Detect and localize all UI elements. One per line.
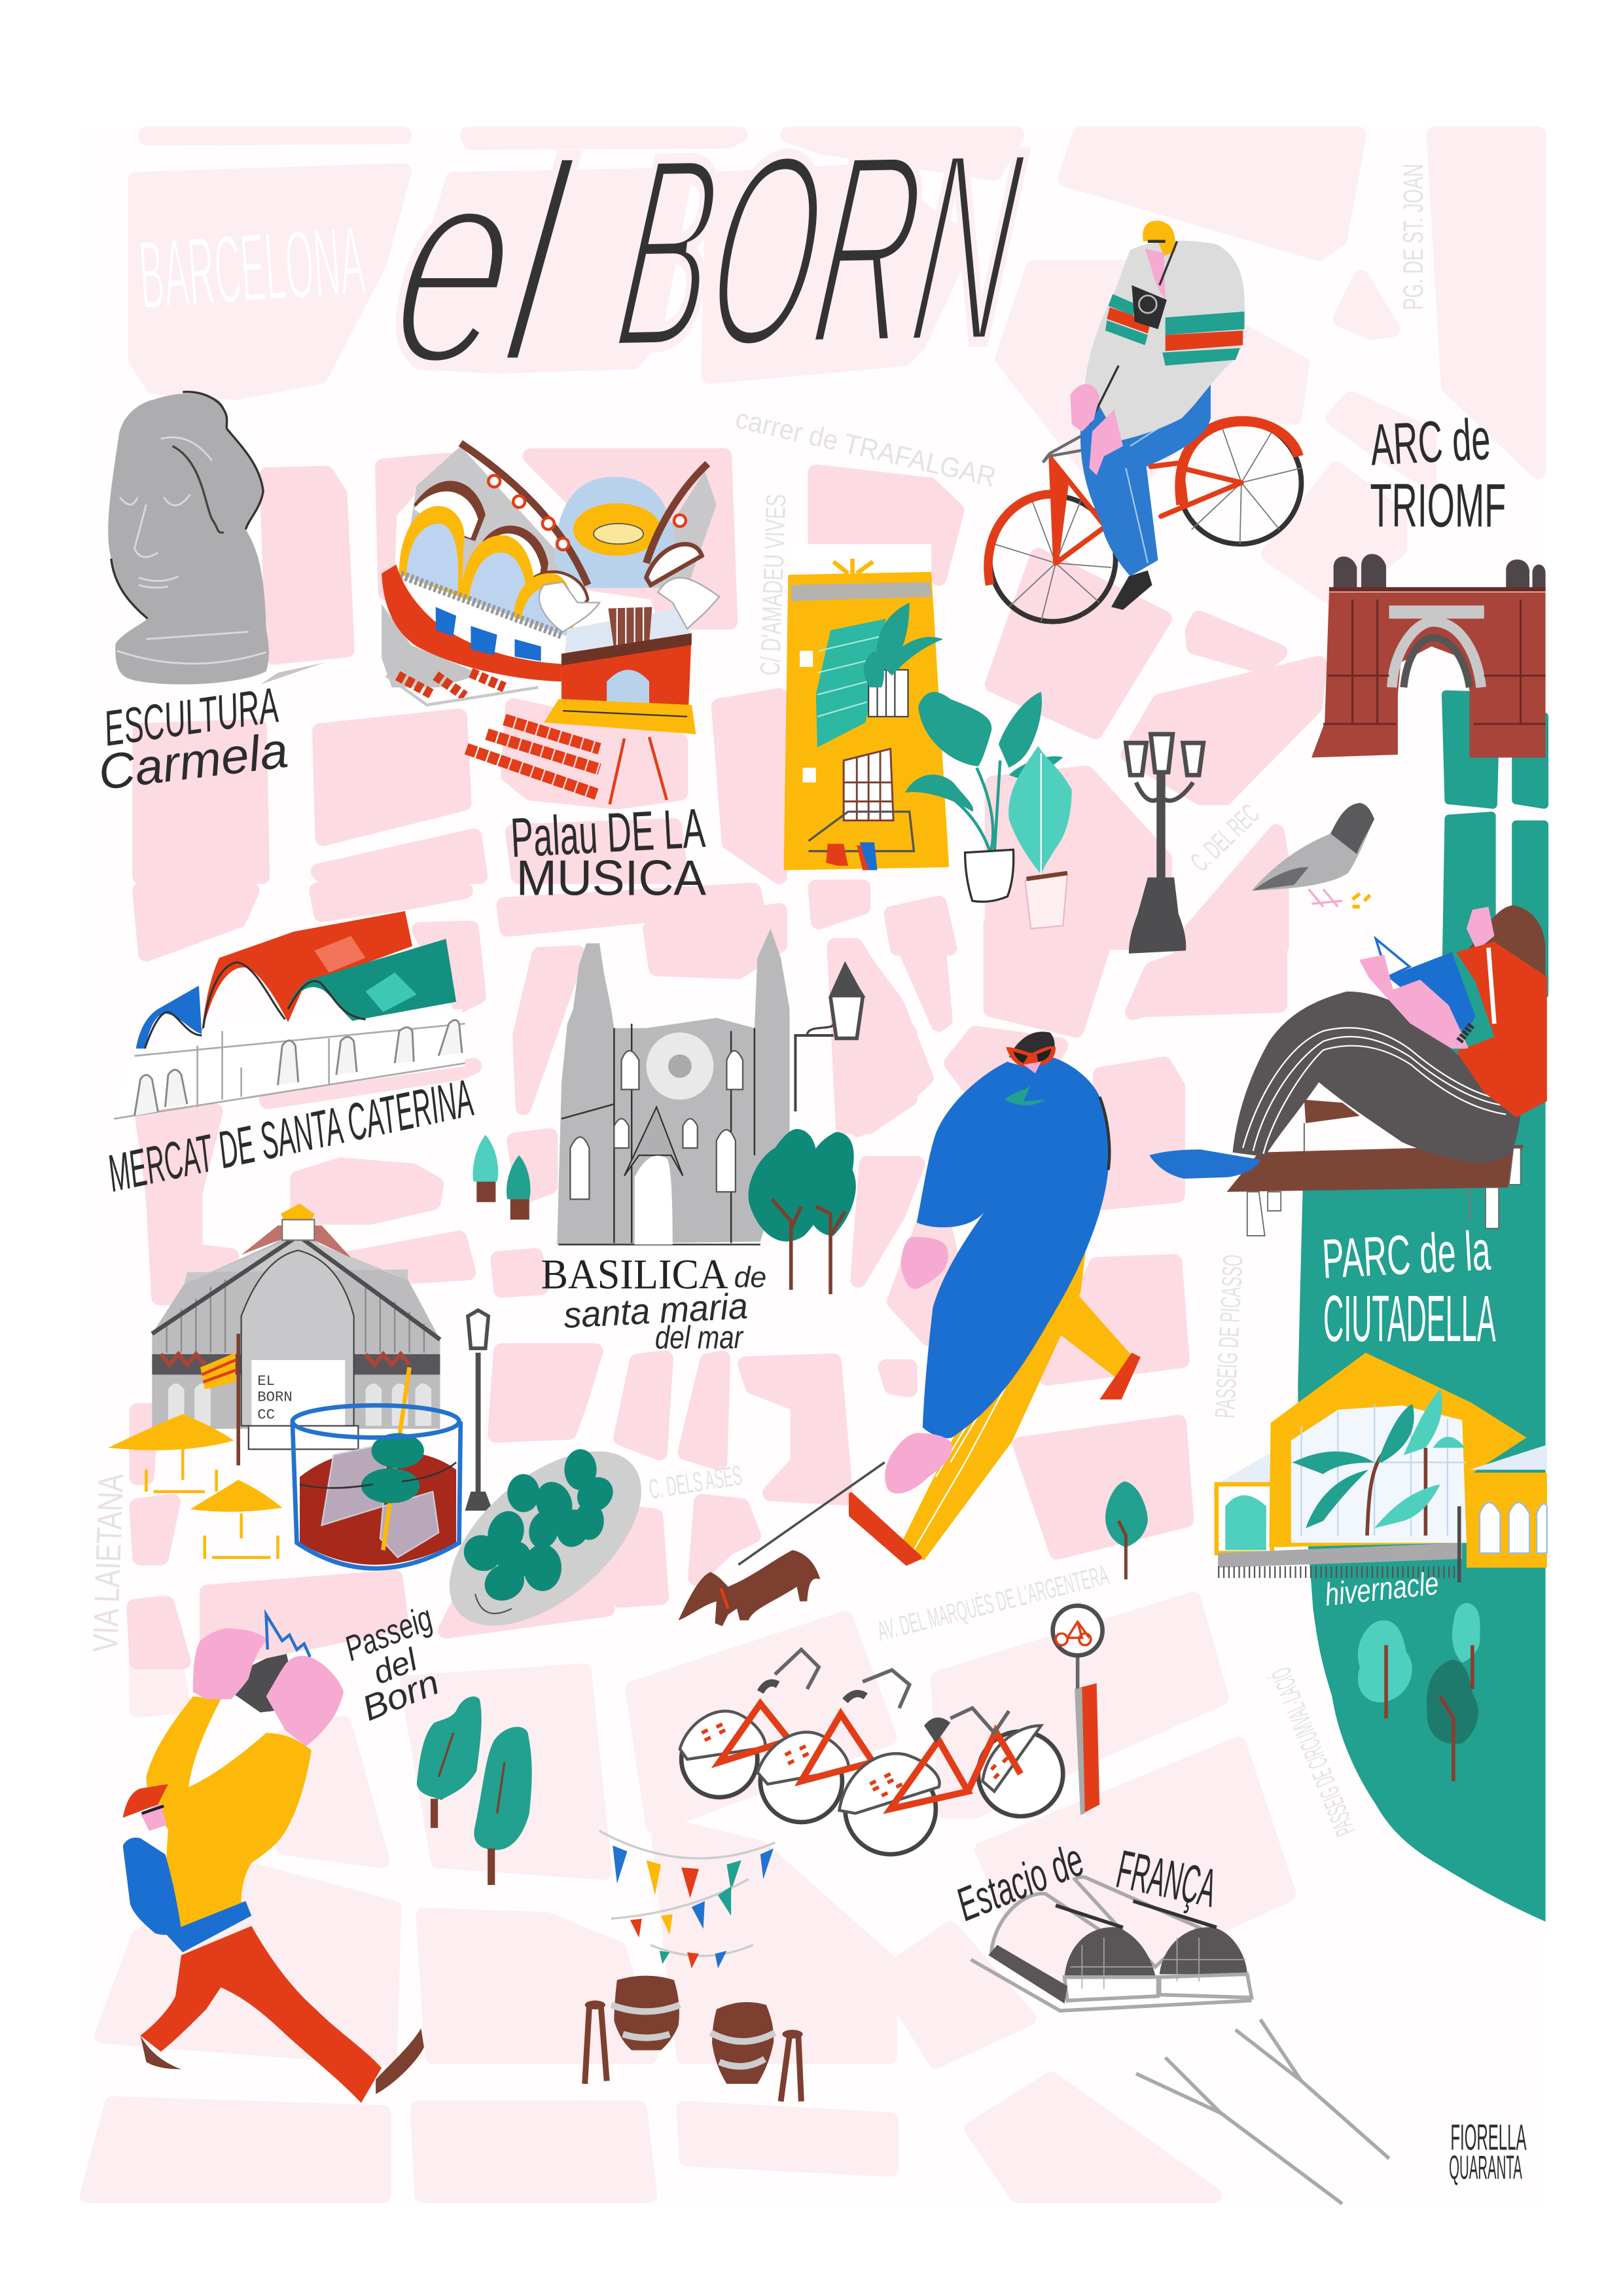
illustration: photographer in yellow sweater: [123, 1615, 424, 2103]
illustration: yellow parasols and tables: [108, 1414, 282, 1559]
illustration: Hivernacle greenhouse: hivernacle: [1323, 1566, 1440, 1613]
park: Ciutadella green area: [1298, 694, 1546, 1922]
title: BORN: [604, 93, 1036, 406]
label: Palau de la Musica: [509, 797, 707, 906]
label: Arc de Triomf: ARC de: [1368, 406, 1492, 478]
label: Estacio de Franca: Estacio de: [950, 1833, 1091, 1931]
label: Passeig del Born: Born: [357, 1662, 444, 1729]
illustration: Arc de Triomf: [1311, 554, 1546, 757]
title: el: [378, 104, 586, 424]
label: Basilica de Santa Maria del Mar: del mar: [655, 1320, 744, 1355]
small topiary trees: [473, 1135, 530, 1219]
illustration: Estacio de Franca: [971, 1877, 1252, 2011]
street labels: AV. DEL MARQUÈS DE L'ARGENTERA: [874, 1559, 1112, 1647]
label: Escultura Carmela: [96, 677, 291, 800]
text: FIORELLA: [1450, 2116, 1527, 2157]
illustration: El Born Centre Cultural: EL: [257, 1372, 275, 1390]
label: Parc de la Ciutadella: [1321, 1219, 1496, 1355]
label: Escultura Carmela: Carmela: [96, 723, 291, 800]
label: Basilica de Santa Maria del Mar: santa maria: [563, 1285, 749, 1336]
illustration: Hivernacle greenhouse: [1213, 1353, 1547, 1613]
text: FRANÇA: [1112, 1839, 1222, 1918]
illustration: Escultura Carmela sculpture: [108, 392, 325, 685]
label: Arc de Triomf: TRIOMF: [1370, 471, 1506, 539]
label: Escultura Carmela: ESCULTURA: [101, 677, 282, 757]
bike 3: [839, 1708, 1063, 1854]
illustration: trees beside basilica: [749, 1129, 856, 1294]
label: Palau de la Musica: Palau DE LA: [509, 797, 707, 869]
illustration: El Born Centre Cultural: [152, 1204, 440, 1465]
illustration: Bicing station bikes: [680, 1649, 1063, 1854]
illustration: vermouth glass: [293, 1367, 461, 1568]
illustration: Passeig del Born trees: [417, 1696, 532, 1885]
illustration: person reading on bench: [1149, 905, 1547, 1236]
illustration: barrels and stools: [585, 1976, 803, 2102]
illustration: walking person in blue sweater: [851, 1031, 1141, 1564]
illustration: railway tracks: [1136, 2020, 1389, 2204]
street labels: PASSEIG DE CIRCUMVAL·LACIÓ: [1266, 1663, 1361, 1840]
illustration: El Born Centre Cultural: BORN: [257, 1389, 293, 1406]
street labels: C. DELS ASES: [647, 1460, 744, 1505]
illustration: dog on a leash: [679, 1462, 885, 1626]
illustration: Palau de la Musica: [382, 443, 719, 804]
label: Estacio de Franca: [950, 1833, 1222, 1931]
illustration: El Born Centre Cultural: CC: [257, 1406, 275, 1423]
label: Passeig del Born: [339, 1598, 444, 1729]
bike 2: [757, 1670, 910, 1822]
illustration: wall lantern: [795, 965, 866, 1111]
label: Passeig del Born: Passeig: [339, 1598, 438, 1668]
street labels: C/ D'AMADEU VIVES: [755, 493, 792, 676]
label: Basilica de Santa Maria del Mar: [541, 1251, 766, 1355]
street labels: C. DEL REC: [1185, 798, 1265, 877]
illustration: bunting flags: [599, 1831, 775, 1968]
label: Palau de la Musica: MUSICA: [516, 850, 706, 906]
text: MERCAT DE SANTA CATERINA: [103, 1069, 478, 1204]
signature: [1449, 2116, 1527, 2186]
rear wheel: [988, 494, 1116, 622]
street labels: PG. DE ST. JOAN: [1398, 164, 1429, 310]
illustration: plate of olives: [419, 1418, 672, 1659]
street labels: [86, 164, 1429, 1840]
illustration: street lamp: [1126, 734, 1204, 954]
bike 1: [680, 1649, 819, 1797]
illustration: potted plants: [905, 692, 1072, 929]
label: Basilica de Santa Maria del Mar: de: [734, 1261, 766, 1293]
text: BARCELONA: [136, 207, 368, 329]
label: Passeig del Born: del: [368, 1641, 423, 1691]
illustration: street lamp by glass: [465, 1310, 493, 1511]
strong pink street blocks: [135, 456, 1319, 1661]
label: Arc de Triomf: [1368, 406, 1506, 539]
title: [378, 93, 1036, 424]
illustration: pigeon: [1252, 803, 1374, 906]
small tree: [1105, 1481, 1148, 1579]
label: Basilica de Santa Maria del Mar: BASILICA: [541, 1251, 728, 1298]
illustration: cyclist on red bike: [988, 221, 1301, 622]
illustration: Basilica de Santa Maria del Mar: [557, 929, 789, 1244]
front wheel: [1179, 422, 1301, 544]
street labels: VIA LAIETANA: [86, 1473, 131, 1653]
street labels: PASSEIG DE PICASSO: [1209, 1253, 1249, 1419]
illustration: Bicing sign post: [1053, 1605, 1103, 1815]
street labels: carrer de TRAFALGAR: [733, 403, 999, 493]
label: Parc de la Ciutadella: PARC de la: [1321, 1219, 1492, 1290]
illustration: Mercat de Santa Caterina: [114, 911, 465, 1119]
illustration: yellow building with balconies: [785, 544, 948, 870]
illustration: park trees: [1358, 1603, 1480, 1781]
